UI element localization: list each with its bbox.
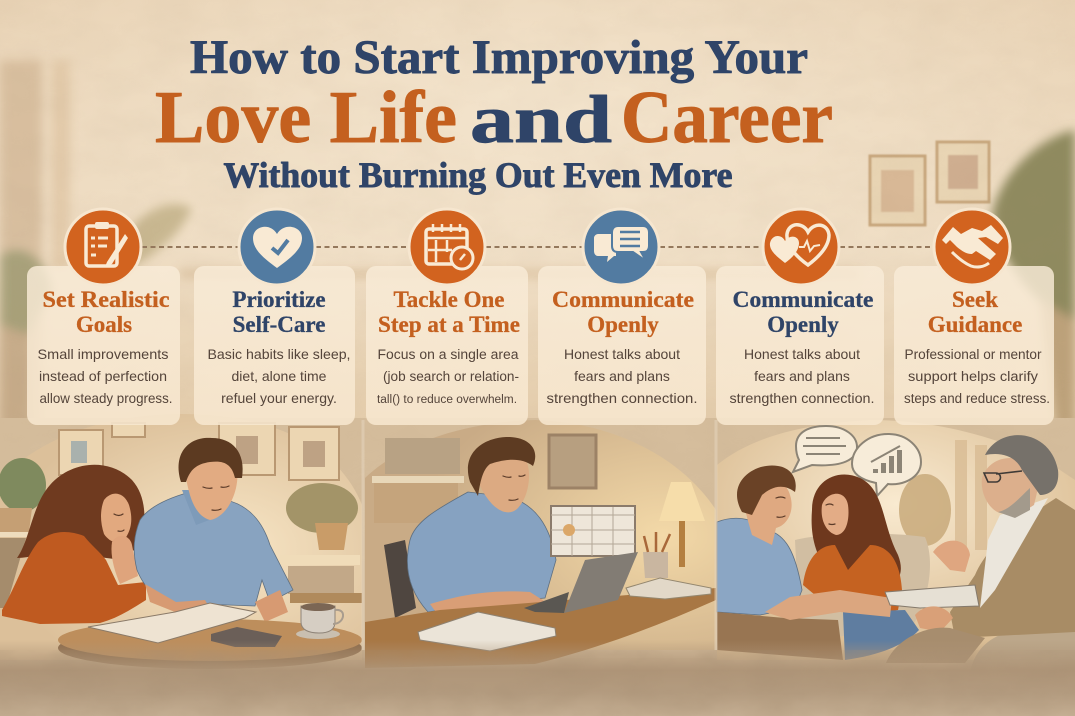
card 3 icon: [409, 209, 485, 285]
title line 2: Career: [621, 77, 833, 159]
step 3: tackle one step: [366, 209, 528, 425]
card 3 heading: Tackle One: [394, 287, 504, 312]
desk: [365, 588, 716, 668]
background: blurred room left: [0, 60, 860, 440]
hair: [737, 465, 796, 515]
card 1 text: allow steady progress.: [40, 390, 172, 406]
laptop: [524, 552, 638, 613]
young man: [717, 465, 843, 660]
card 5 heading: Communicate: [732, 287, 874, 312]
card 4 heading: Communicate: [552, 287, 694, 312]
card 5 icon: [763, 209, 839, 285]
joined hands: [765, 590, 892, 620]
facial features: [503, 475, 525, 500]
background: plant right: [992, 130, 1075, 430]
connector: dotted line: [142, 246, 933, 248]
documents on desk: [418, 612, 556, 651]
hair: [812, 475, 901, 590]
wall calendar: [551, 506, 635, 556]
speech bubble: chart: [852, 434, 921, 496]
card 3 text: (job search or relation-: [383, 369, 519, 384]
title line 2: and: [470, 81, 612, 157]
stacked papers: [626, 578, 711, 599]
title line 2: Love Life: [155, 77, 457, 159]
man open collar: [182, 490, 226, 525]
man neck and face: [185, 447, 237, 520]
framed pictures: [59, 423, 339, 480]
glasses: [984, 471, 1022, 482]
card 1: [27, 266, 180, 425]
raised hand: [933, 541, 970, 572]
card 3: [366, 266, 528, 425]
title line 1: How to Start Improving Your: [190, 31, 808, 84]
scene: man working on laptop: [365, 420, 716, 668]
coffee mug: [296, 603, 343, 639]
plant left: [0, 458, 46, 608]
card 2 text: diet, alone time: [232, 368, 327, 384]
woman hair: [17, 465, 144, 560]
man hair: [179, 438, 243, 482]
framed notice: [549, 435, 596, 488]
card 6 heading: Seek: [952, 287, 998, 312]
hair: [468, 437, 535, 496]
jeans: [843, 610, 919, 660]
card 4 text: fears and plans: [574, 368, 670, 384]
title line 2: [155, 77, 833, 159]
card 6: [894, 266, 1054, 425]
title: [155, 31, 833, 195]
man facial features: [203, 486, 229, 510]
jacket: [950, 498, 1075, 638]
chair: [384, 540, 416, 618]
facial features: [776, 497, 785, 517]
trousers: [886, 628, 985, 663]
face: [744, 479, 792, 545]
card 2 heading: Self-Care: [233, 312, 325, 337]
card 1 text: Small improvements: [38, 346, 168, 362]
card 2 heading: Prioritize: [232, 287, 326, 312]
woman face: [101, 494, 131, 542]
card 2: [194, 266, 355, 425]
man at laptop: [407, 437, 556, 618]
mentor: [885, 435, 1075, 677]
card 6 text: steps and reduce stress.: [904, 391, 1050, 406]
face: [475, 452, 529, 512]
card 2 icon: [239, 209, 315, 285]
scene: couple with mentor: [717, 420, 1075, 677]
sweater: [803, 545, 902, 617]
face: [982, 458, 1040, 515]
scene dividers: [363, 420, 716, 650]
young woman: [765, 475, 919, 660]
card 3 heading: Step at a Time: [378, 312, 520, 337]
lower hand: [915, 606, 953, 632]
picture details: [71, 436, 325, 467]
background plant: [899, 474, 951, 546]
card 5 text: Honest talks about: [744, 346, 860, 362]
room arch: [717, 420, 1075, 660]
window columns: [955, 440, 987, 550]
card 5: [716, 266, 884, 425]
table: [58, 619, 362, 669]
woman sweater: [2, 532, 146, 624]
scene: couple planning at table: [0, 414, 362, 669]
card 4 icon: [583, 209, 659, 285]
shirt: [407, 492, 556, 612]
bookshelf: [372, 438, 464, 523]
forearm: [430, 591, 552, 618]
table lamp: [659, 482, 705, 567]
step 4: communicate openly: [538, 209, 706, 425]
step 1: set realistic goals: [27, 209, 180, 425]
background: walls around arches: [0, 418, 1075, 658]
woman arm: [111, 536, 138, 584]
card 5 text: strengthen connection.: [730, 390, 874, 406]
man writing: [134, 438, 293, 622]
mist texture: [0, 650, 1075, 716]
shelf right: [280, 555, 362, 603]
chair: [969, 622, 1075, 677]
card 1 icon: [65, 209, 141, 285]
title line 3: Without Burning Out Even More: [224, 155, 733, 195]
notebook: [88, 603, 256, 643]
card 5 heading: Openly: [767, 312, 839, 337]
pen cup: [643, 532, 670, 578]
step 2: prioritize self-care: [194, 209, 355, 425]
background: framed pictures: [870, 142, 989, 225]
card 6 heading: Guidance: [928, 312, 1022, 337]
speech bubble: text: [793, 426, 857, 472]
plant right: [286, 483, 358, 550]
phone on table: [211, 627, 282, 647]
hair: [985, 435, 1058, 495]
step 6: seek guidance: [894, 209, 1054, 425]
woman closed eye: [114, 514, 124, 531]
card 4: [538, 266, 706, 425]
card 1 heading: Goals: [76, 312, 132, 337]
card 5 text: fears and plans: [754, 368, 850, 384]
card 3 text: Focus on a single area: [378, 347, 519, 362]
shirt: [717, 518, 802, 615]
room arch: [0, 414, 362, 660]
card 6 text: Professional or mentor: [904, 347, 1042, 362]
card 4 text: Honest talks about: [564, 346, 680, 362]
man forearms: [145, 584, 212, 617]
room arch: [365, 420, 716, 650]
card 1 text: instead of perfection: [39, 368, 167, 384]
card 2 text: Basic habits like sleep,: [208, 346, 350, 362]
card 2 text: refuel your energy.: [221, 390, 337, 406]
card 4 text: strengthen connection.: [546, 390, 698, 406]
tablet: [885, 585, 979, 608]
misty bottom fade: [0, 640, 1075, 716]
shirt: [980, 498, 1048, 608]
trousers: [717, 612, 843, 660]
beard: [998, 488, 1030, 518]
man shirt: [134, 492, 293, 606]
card 1 heading: Set Realistic: [42, 287, 170, 312]
facial features: [826, 504, 835, 524]
card 3 text: tall() to reduce overwhelm.: [377, 394, 517, 406]
card 6 text: support helps clarify: [908, 369, 1038, 384]
face: [822, 494, 848, 535]
card 4 heading: Openly: [587, 312, 659, 337]
woman: [2, 465, 146, 624]
card 6 icon: [934, 209, 1010, 285]
step 5: communicate openly: [716, 209, 884, 425]
sofa: [795, 534, 930, 640]
